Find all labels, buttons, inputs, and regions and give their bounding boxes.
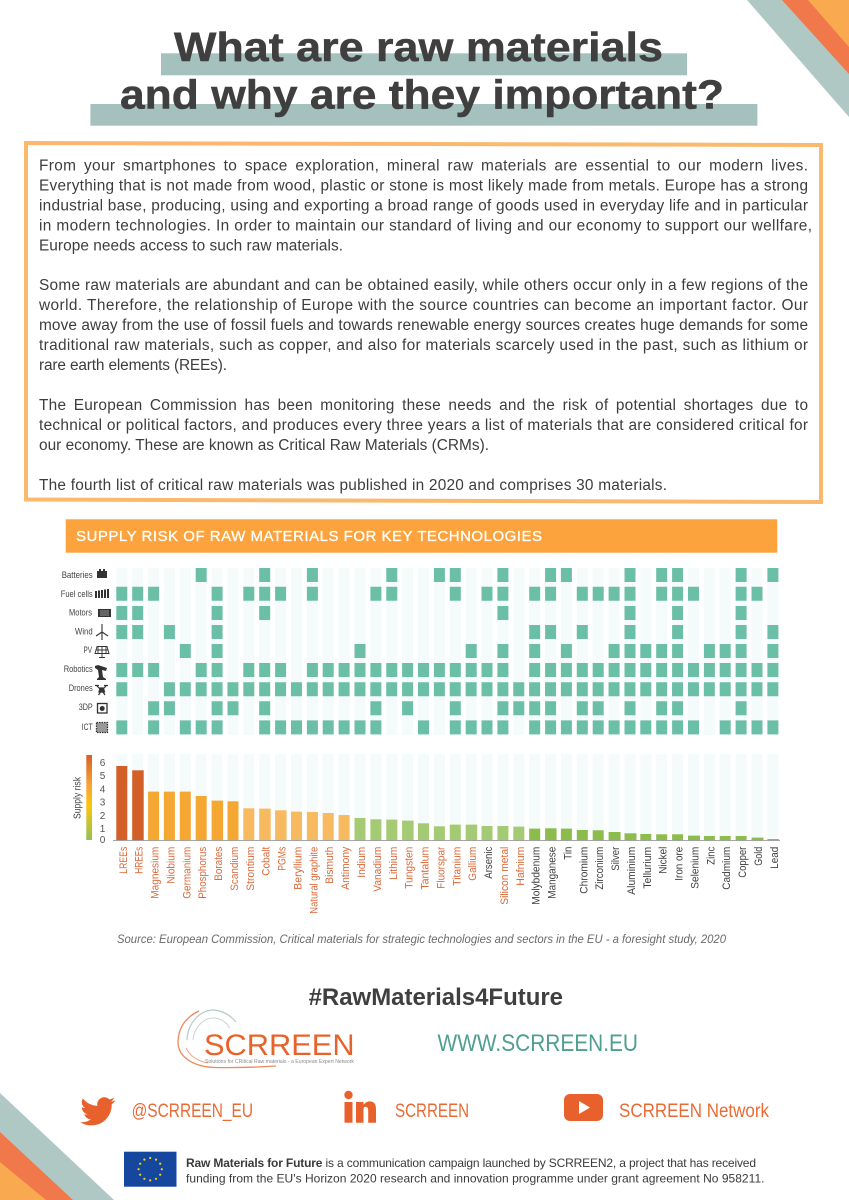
- material labels: Antimony: [340, 846, 352, 890]
- axis: supply risk scale: 3: [100, 798, 106, 808]
- material labels: Titanium: [451, 847, 463, 886]
- row: Robotics: Robotics: [64, 664, 93, 675]
- material labels: Phosphorus: [197, 846, 209, 899]
- social: LinkedIn: [344, 1091, 469, 1123]
- material labels: Natural graphite: [308, 847, 320, 914]
- row: ICT: [82, 722, 778, 733]
- funding statement: funding from the EU's Horizon 2020 research and innovation programme under grant agreement No 958211.: [186, 1172, 764, 1186]
- material labels: Beryllium: [292, 847, 304, 890]
- material labels: Tungsten: [404, 847, 416, 889]
- chart heading: [66, 519, 777, 553]
- technology matrix: [61, 569, 778, 733]
- material labels: Lead: [769, 847, 781, 869]
- axis: supply risk scale: 2: [100, 811, 106, 822]
- material labels: Scandium: [229, 847, 241, 891]
- funding statement: [186, 1156, 764, 1186]
- axis: supply risk scale: 5: [100, 771, 106, 782]
- material labels: Tellurium: [642, 847, 654, 889]
- material labels: Lithium: [388, 847, 400, 880]
- material labels: Zinc: [705, 846, 717, 865]
- paragraph 4: The fourth list of critical raw materials was published in 2020 and comprises 30 materials.: [39, 477, 667, 494]
- paragraph 2: rare earth elements (REEs).: [39, 357, 227, 374]
- paragraph 3: [39, 397, 808, 454]
- title: and why are they important?: [120, 72, 724, 118]
- row: ICT: ICT: [82, 722, 93, 733]
- material labels: Tantalum: [420, 847, 432, 890]
- material labels: Magnesium: [150, 847, 162, 899]
- social: Twitter: @SCRREEN_EU: [132, 1101, 253, 1122]
- hashtag: #RawMaterials4Future: [309, 984, 563, 1011]
- axis: supply risk scale: 4: [100, 784, 106, 796]
- paragraph 1: Europe needs access to such raw materials.: [39, 238, 343, 254]
- logo: SCRREEN: [178, 1010, 355, 1068]
- title: What are raw materials: [174, 24, 663, 70]
- material labels: Hafnium: [515, 847, 527, 886]
- material labels: Iron ore: [674, 847, 686, 881]
- axis: supply risk scale: 6: [100, 758, 106, 769]
- material labels: PGMs: [277, 846, 289, 871]
- axis: supply risk scale: 1: [100, 824, 106, 835]
- row: Batteries: [62, 569, 778, 581]
- chart heading: SUPPLY RISK OF RAW MATERIALS FOR KEY TECHNOLOGIES: [76, 528, 542, 545]
- axis: supply risk scale: [72, 755, 106, 846]
- material labels: LREEs: [118, 846, 130, 874]
- material labels: Silicon metal: [499, 847, 511, 905]
- material labels: Aluminium: [626, 847, 638, 895]
- material labels: Nickel: [658, 847, 670, 874]
- row: Wind: Wind: [75, 626, 93, 638]
- material labels: Manganese: [547, 847, 559, 899]
- paragraph 2: Some raw materials are abundant and can be obtained easily, while others occur only in a few regions of the: [39, 277, 808, 294]
- paragraph 2: move away from the use of fossil fuels and towards renewable energy sources creates huge demands for some: [39, 317, 808, 334]
- paragraph 3: The European Commission has been monitoring these needs and the risk of potential shortages due to: [39, 397, 808, 414]
- material labels: Indium: [356, 847, 368, 878]
- row: PV: [84, 645, 778, 658]
- row: Fuel cells: Fuel cells: [61, 589, 93, 600]
- paragraph 2: world. Therefore, the relationship of Europe with the source countries can become an important factor. Our: [38, 297, 808, 314]
- icon: youtube: [564, 1094, 603, 1121]
- material labels: Copper: [737, 846, 749, 878]
- row: Drones: [69, 683, 778, 695]
- material labels: Zirconium: [594, 847, 606, 890]
- icon: EU flag: [124, 1152, 176, 1187]
- row: Drones: Drones: [69, 683, 93, 694]
- funding statement: Raw Materials for Future is a communication campaign launched by SCRREEN2, a project that has received: [186, 1156, 756, 1170]
- social: LinkedIn: SCRREEN: [395, 1101, 469, 1122]
- material labels: Chromium: [578, 847, 590, 894]
- material labels: Gallium: [467, 847, 479, 881]
- material labels: Borates: [213, 846, 225, 881]
- material labels: Cobalt: [261, 847, 273, 876]
- logo: SCRREEN: Solutions for CRitical Raw materials - a European Expert Network: [205, 1059, 355, 1065]
- social: YouTube: [564, 1094, 769, 1122]
- source note: Source: European Commission, Critical materials for strategic technologies and sectors in the EU - a foresight study, 2020: [117, 932, 726, 946]
- axis: supply risk scale: 0: [100, 835, 106, 846]
- material labels: Fluorspar: [435, 846, 447, 889]
- paragraph 3: technical or political factors, and produces every three years a list of materials that are considered critical for: [39, 417, 808, 434]
- paragraph 1: From your smartphones to space exploration, mineral raw materials are essential to our modern lives.: [39, 158, 808, 174]
- paragraph 1: Everything that is not made from wood, plastic or stone is most likely made from metals. Europe has a strong: [39, 178, 808, 194]
- material labels: HREEs: [134, 846, 146, 874]
- material labels: Germanium: [181, 847, 193, 899]
- row: 3DP: 3DP: [79, 702, 93, 713]
- panel: introduction text: [26, 143, 821, 502]
- paragraph 3: our economy. These are known as Critical Raw Materials (CRMs).: [39, 437, 489, 454]
- material labels: Silver: [610, 846, 622, 871]
- row: Motors: Motors: [69, 608, 92, 618]
- bar chart: supply risk: [72, 755, 781, 914]
- paragraph 1: in modern technologies. In order to maintain our standard of living and our economy to support our wellfare,: [39, 218, 812, 234]
- material labels: Vanadium: [372, 847, 384, 892]
- axis: supply risk scale: Supply risk: [72, 776, 84, 819]
- row: Wind: [75, 624, 778, 640]
- paragraph 1: industrial base, producing, using and exporting a broad range of goods used in everyday life and in particular: [39, 198, 808, 214]
- material labels: Gold: [753, 847, 765, 866]
- paragraph 1: [39, 158, 812, 254]
- bars: [116, 766, 779, 840]
- material labels: Bismuth: [324, 847, 336, 884]
- icon: linkedin: [344, 1091, 376, 1123]
- material labels: Arsenic: [483, 846, 495, 879]
- material labels: [118, 846, 781, 914]
- material labels: Molybdenum: [531, 847, 543, 905]
- material labels: Strontium: [245, 847, 257, 891]
- row: Fuel cells: [61, 589, 762, 600]
- material labels: Niobium: [165, 847, 177, 884]
- material labels: Cadmium: [721, 847, 733, 890]
- website: WWW.SCRREEN.EU: [438, 1030, 638, 1057]
- paragraph 2: [38, 277, 808, 374]
- row: 3DP: [79, 702, 747, 713]
- row: PV: PV: [84, 645, 92, 656]
- social: YouTube: SCRREEN Network: [619, 1101, 769, 1122]
- social: Twitter: [80, 1097, 253, 1125]
- row: Batteries: Batteries: [62, 570, 93, 581]
- corner decoration: top right: [747, 0, 849, 117]
- paragraph 2: traditional raw materials, such as copper, and also for materials scarcely used in the past, such as lithium or: [39, 337, 808, 354]
- material labels: Selenium: [690, 847, 702, 889]
- row: Motors: [69, 608, 747, 618]
- material labels: Tin: [562, 847, 574, 860]
- row: Robotics: [64, 664, 778, 680]
- title: [90, 24, 757, 126]
- logo: SCRREEN: SCRREEN: [204, 1029, 355, 1062]
- corner decoration: bottom left: [0, 1093, 114, 1200]
- icon: twitter bird: [80, 1097, 115, 1125]
